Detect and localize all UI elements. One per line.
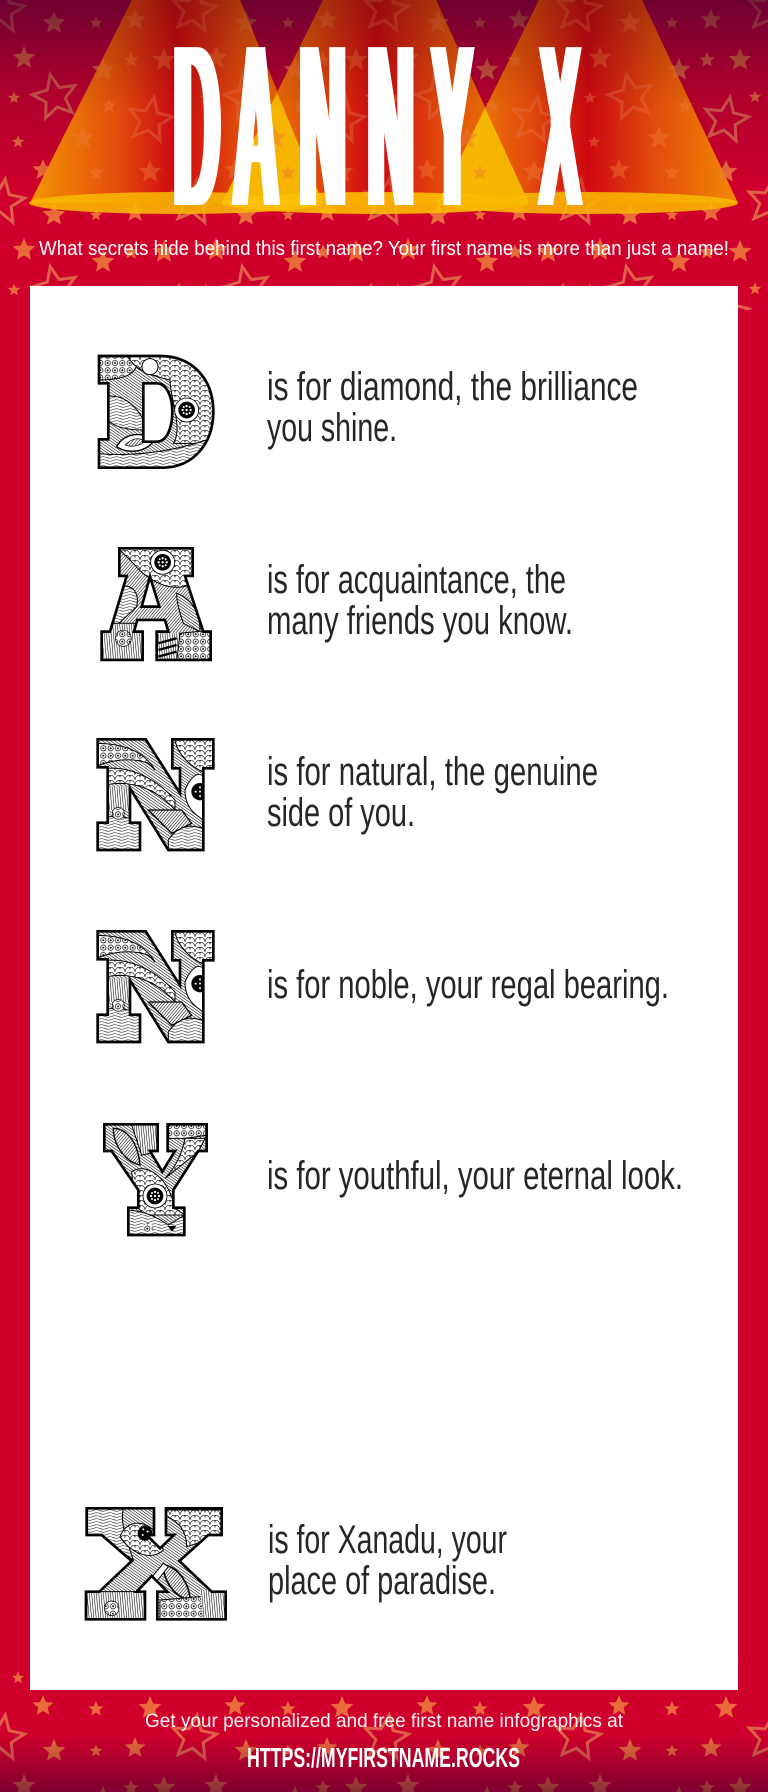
stars showing through spotlights (44, 0, 726, 192)
footer text: Get your personalized and free first name infographics at (145, 1710, 624, 1732)
text: D line: is for diamond, the brilliance (267, 365, 638, 409)
spotlights (0, 0, 768, 214)
spotlight top shade (86, 0, 684, 92)
text: N line 2: side of you. (267, 791, 415, 835)
icon: letter N second (95, 929, 215, 1045)
row: N second (95, 929, 669, 1045)
icon: letter D (97, 353, 217, 470)
icon: letter N (95, 737, 215, 853)
icon: letter A (100, 547, 213, 663)
icon: letter Y (102, 1122, 208, 1238)
text: D line 2: you shine. (267, 406, 397, 450)
text: X line 2: place of paradise. (268, 1559, 496, 1603)
spotlight base: left (29, 192, 323, 214)
footer url: HTTPS://MYFIRSTNAME.ROCKS (247, 1742, 520, 1773)
row: N (95, 737, 598, 853)
spotlight base: middle (222, 192, 528, 214)
spotlight overlap right (438, 108, 529, 203)
row: D (97, 353, 638, 470)
row: X (83, 1507, 507, 1622)
icon: letter X (83, 1507, 230, 1622)
row: A (100, 547, 573, 663)
text: A line 2: many friends you know. (267, 599, 573, 643)
spotlight: left (30, 0, 323, 203)
spotlight base: right (438, 192, 738, 214)
text: N line: is for natural, the genuine (267, 750, 598, 794)
spotlight overlap left (222, 93, 323, 203)
text: X line: is for Xanadu, your (268, 1518, 507, 1562)
bottom shade gradient (0, 1735, 768, 1792)
spotlight: right (438, 0, 738, 203)
row: Y (102, 1122, 683, 1238)
star pattern: bottom band (0, 1660, 768, 1792)
panel: white content area (30, 286, 738, 1690)
top shade gradient (0, 0, 768, 190)
text: A line: is for acquaintance, the (267, 558, 566, 602)
star pattern: top band (0, 0, 768, 310)
spotlight: middle (222, 0, 529, 203)
